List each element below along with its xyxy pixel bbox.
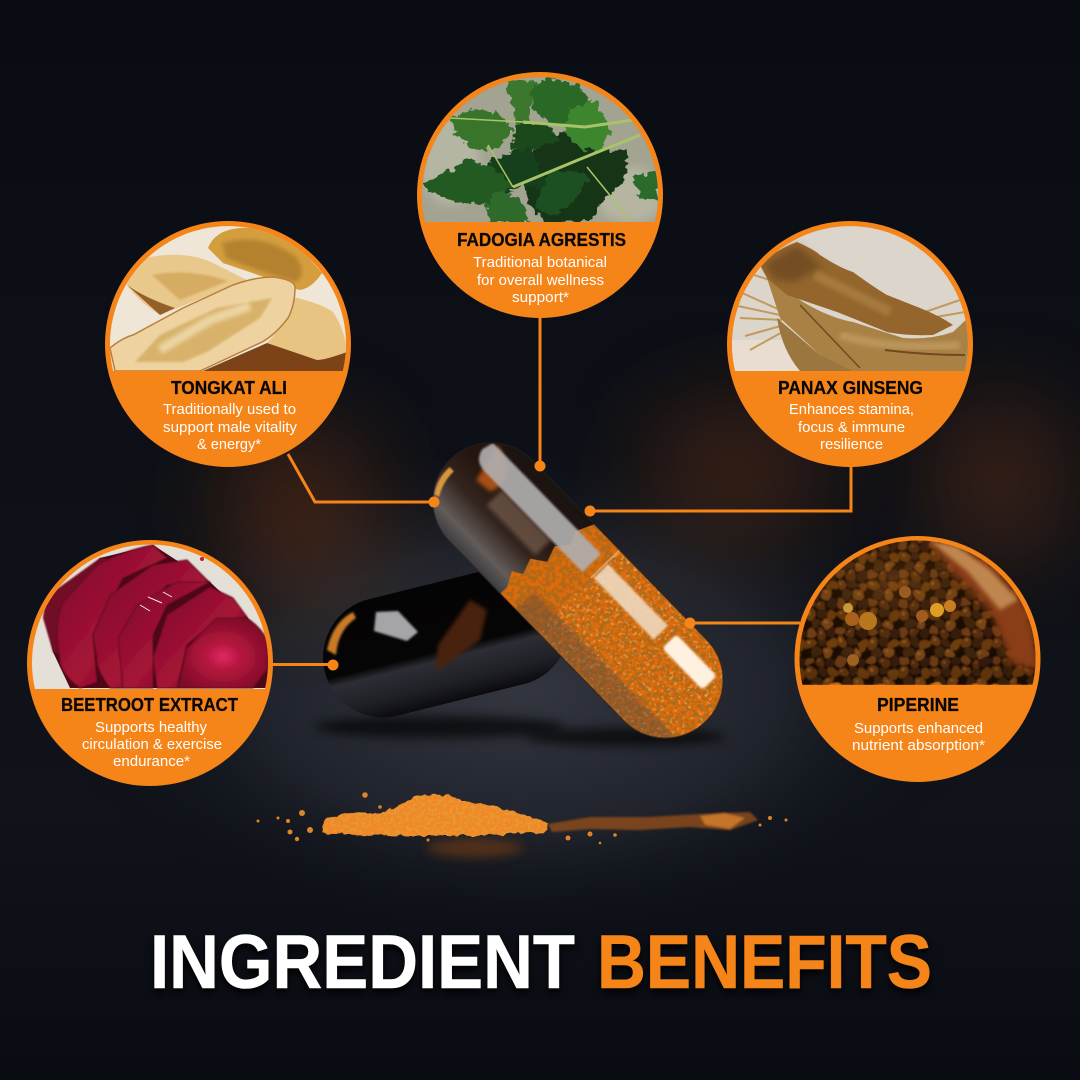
description: support*: [512, 290, 569, 306]
description: focus & immune: [798, 420, 905, 436]
panel: Tongkat Ali: [105, 221, 351, 467]
description: resilience: [820, 437, 883, 453]
glass highlights: [472, 441, 601, 572]
connector: Beetroot Extract: [270, 660, 338, 670]
description: & energy*: [197, 437, 261, 453]
panel: Panax Ginseng: [727, 221, 973, 467]
clear capsule with orange powder: [409, 419, 752, 767]
connector: Piperine: [684, 618, 800, 628]
description: [163, 402, 298, 453]
heading: BEETROOT EXTRACT: [61, 694, 239, 715]
title: BENEFITS: [597, 920, 932, 1005]
powder pile: [256, 792, 788, 857]
connector: Fadogia Agrestis: [534, 316, 546, 472]
panel: Beetroot Extract: [27, 540, 273, 786]
description: [82, 720, 222, 770]
heading: PANAX GINSENG: [778, 377, 923, 398]
heading: PIPERINE: [877, 694, 959, 715]
description: for overall wellness: [477, 273, 604, 289]
description: [789, 402, 914, 453]
black capsule highlight: [374, 611, 418, 641]
description: [473, 255, 607, 306]
heading: FADOGIA AGRESTIS: [457, 229, 626, 250]
description: Supports enhanced: [854, 721, 983, 737]
description: nutrient absorption*: [852, 738, 985, 754]
description: circulation & exercise: [82, 737, 222, 753]
description: Traditional botanical: [473, 255, 607, 271]
title: [150, 920, 932, 1005]
photo: beetroot slices: [27, 540, 273, 689]
description: Traditionally used to: [163, 402, 296, 418]
photo: piperine seeds: [795, 536, 1041, 685]
connector: Tongkat Ali: [288, 454, 440, 508]
title: INGREDIENT: [150, 920, 575, 1005]
heading: TONGKAT ALI: [171, 377, 287, 398]
description: Supports healthy: [95, 720, 208, 736]
panel: Piperine: [794, 536, 1041, 782]
description: endurance*: [113, 754, 190, 770]
photo: tongkat ali slices: [105, 221, 351, 371]
photo: ginseng root: [727, 221, 973, 371]
panel: Fadogia Agrestis: [417, 72, 665, 318]
black capsule: [317, 572, 564, 742]
description: Enhances stamina,: [789, 402, 914, 418]
connector: Panax Ginseng: [584, 465, 851, 516]
description: [852, 721, 985, 754]
powder fill: [500, 524, 724, 738]
description: support male vitality: [163, 420, 298, 436]
photo: fadogia leaves: [417, 72, 665, 223]
